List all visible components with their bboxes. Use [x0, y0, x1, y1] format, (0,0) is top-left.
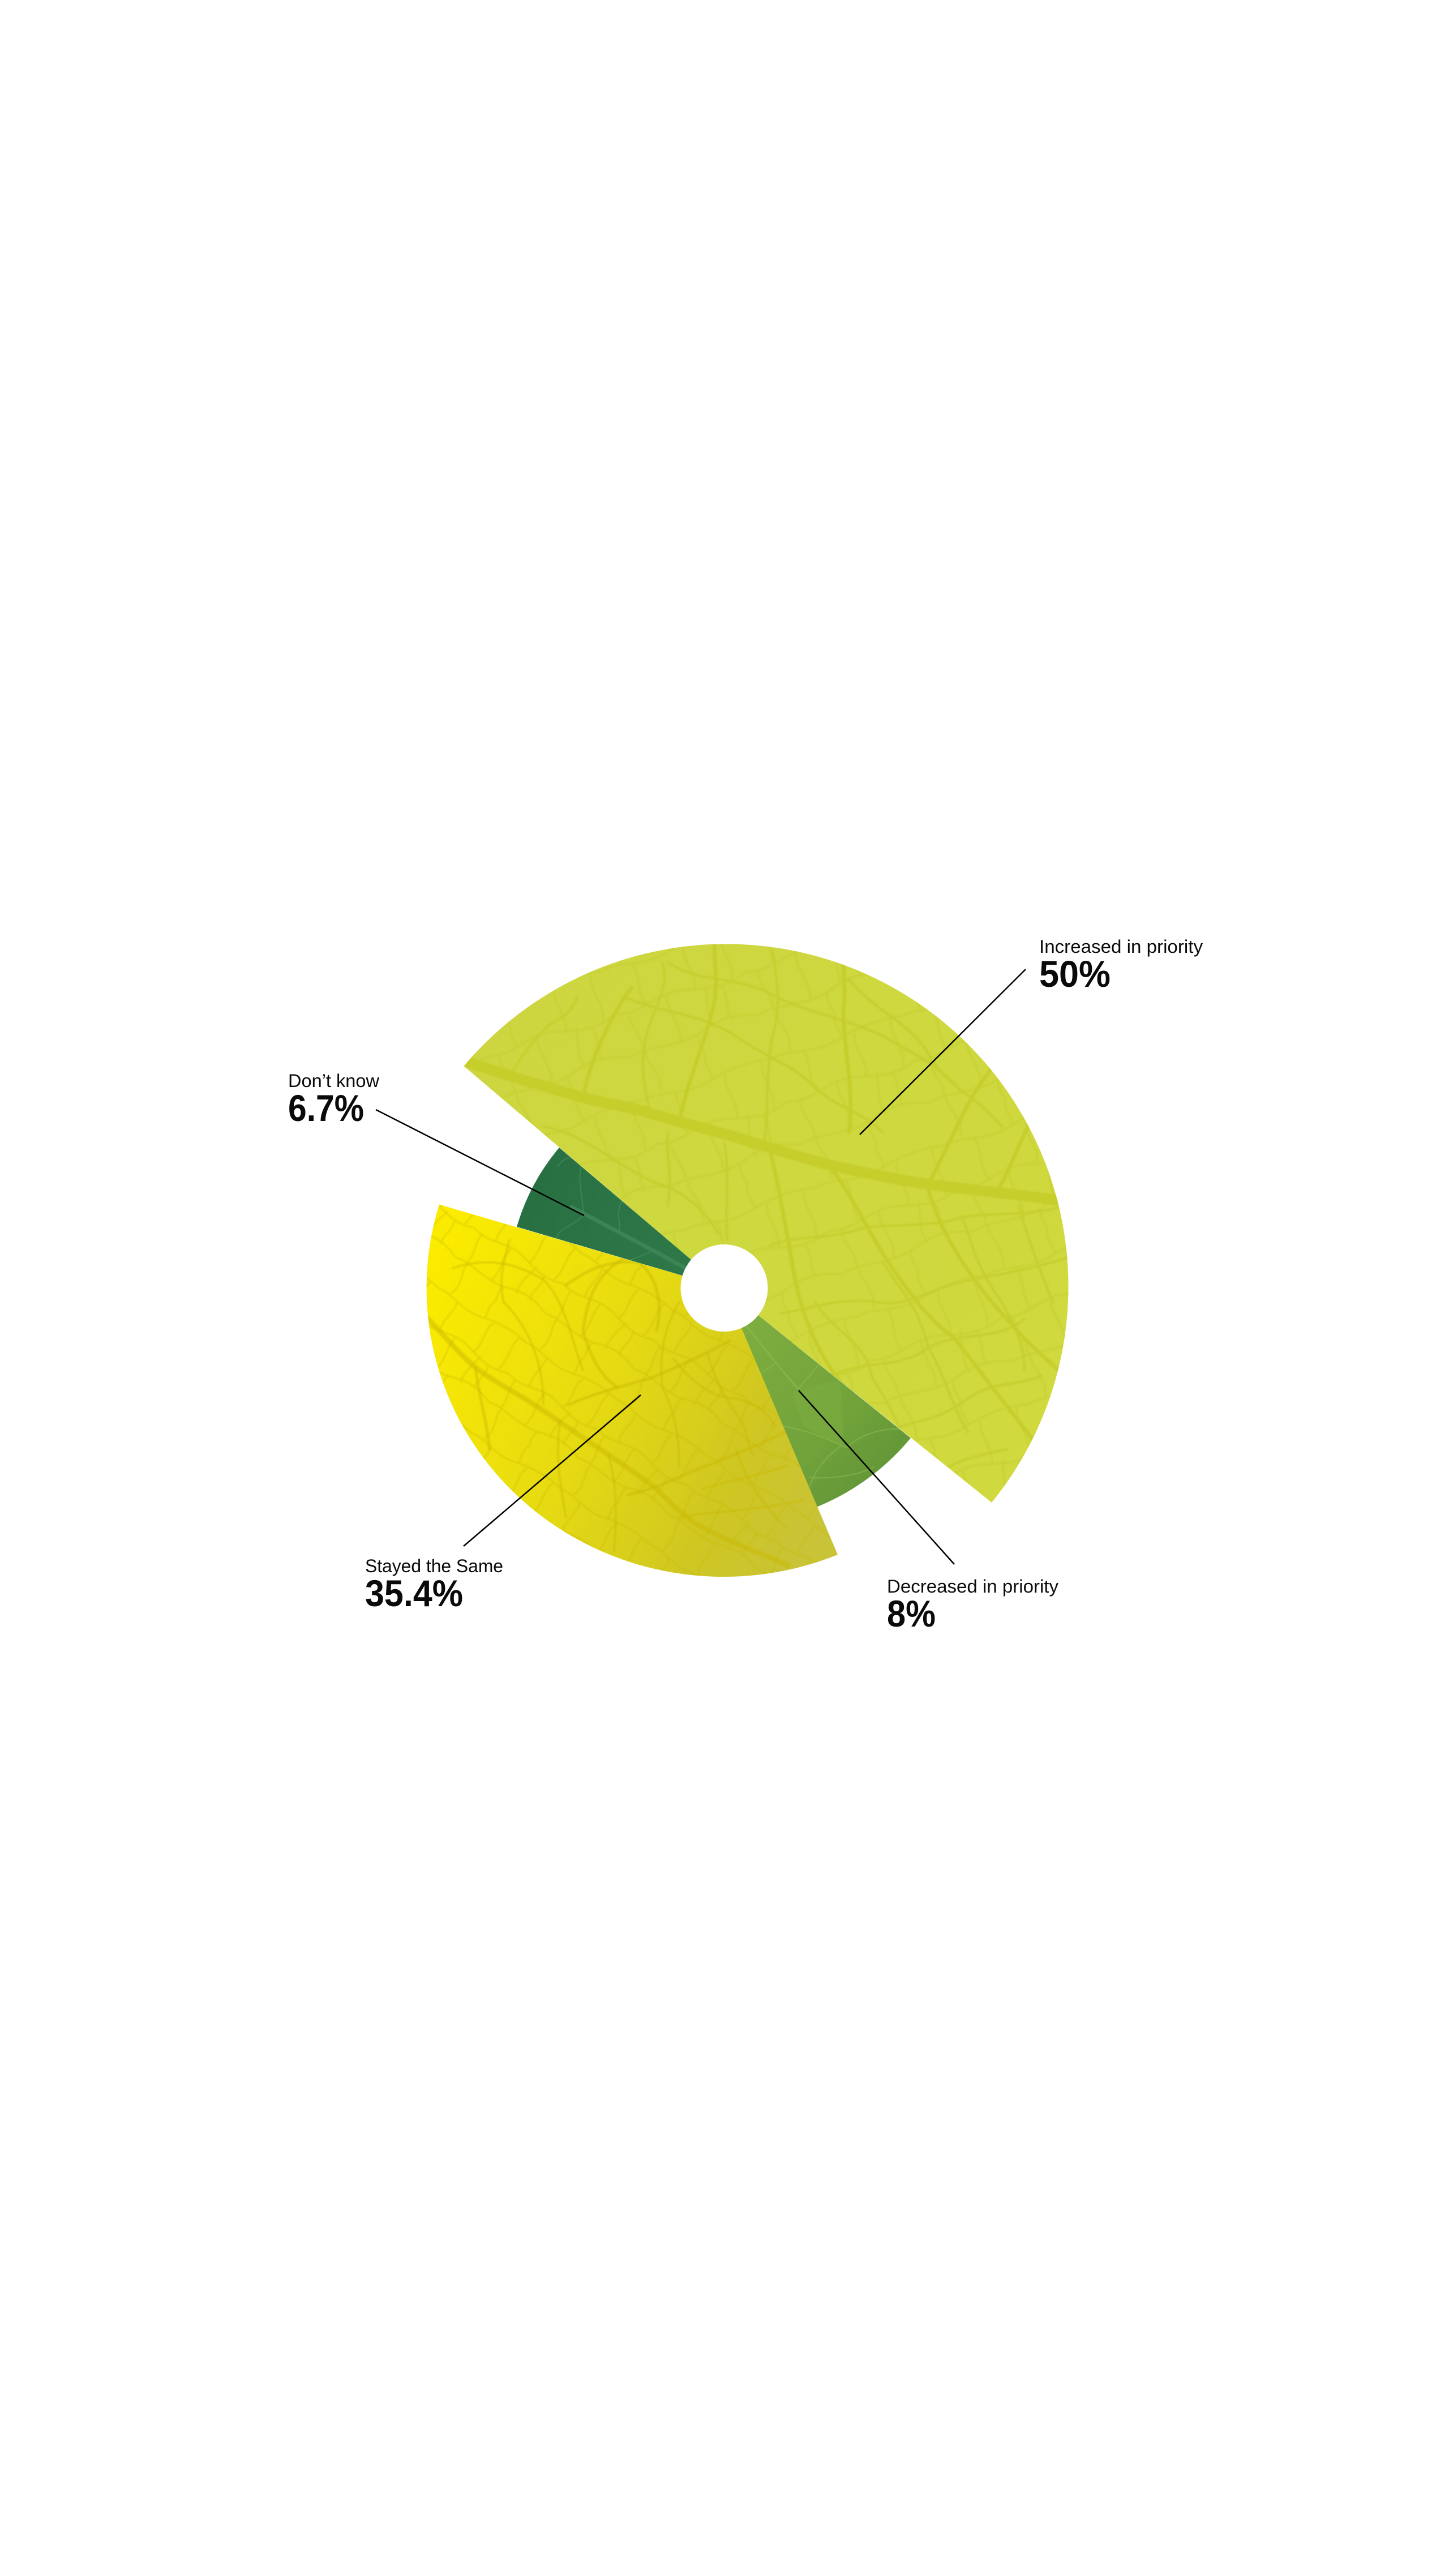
label: increased in priority 50% — [1039, 936, 1203, 995]
leader line: don't know — [376, 1110, 584, 1216]
label: don't know 6.7% — [288, 1071, 380, 1129]
slice: stayed the same (yellow leaf) — [419, 1195, 849, 1585]
radial pie chart infographic — [289, 940, 1203, 1627]
leader line: decreased in priority — [799, 1390, 954, 1564]
label: stayed the same 35.4%: Stayed the Same — [365, 1556, 503, 1576]
slice: increased in priority (yellow-green leaf) — [453, 934, 1081, 1512]
label: don't know 6.7%: 6.7% — [288, 1087, 364, 1129]
center hole — [680, 1244, 768, 1332]
label: decreased in priority 8% — [887, 1576, 1058, 1634]
label: increased in priority 50%: 50% — [1039, 953, 1111, 995]
leader line: stayed the same — [464, 1395, 641, 1546]
slice: don't know (dark green leaf) — [517, 1148, 691, 1276]
label: don't know 6.7%: Don’t know — [288, 1071, 380, 1091]
label: increased in priority 50%: Increased in priority — [1039, 936, 1203, 957]
label: stayed the same 35.4% — [365, 1556, 503, 1614]
leader line: increased in priority — [860, 969, 1026, 1135]
label: decreased in priority 8%: Decreased in priority — [887, 1576, 1058, 1597]
label: decreased in priority 8%: 8% — [887, 1593, 936, 1634]
label: stayed the same 35.4%: 35.4% — [365, 1572, 463, 1614]
slice: decreased in priority (mid green leaf) — [741, 1315, 911, 1507]
